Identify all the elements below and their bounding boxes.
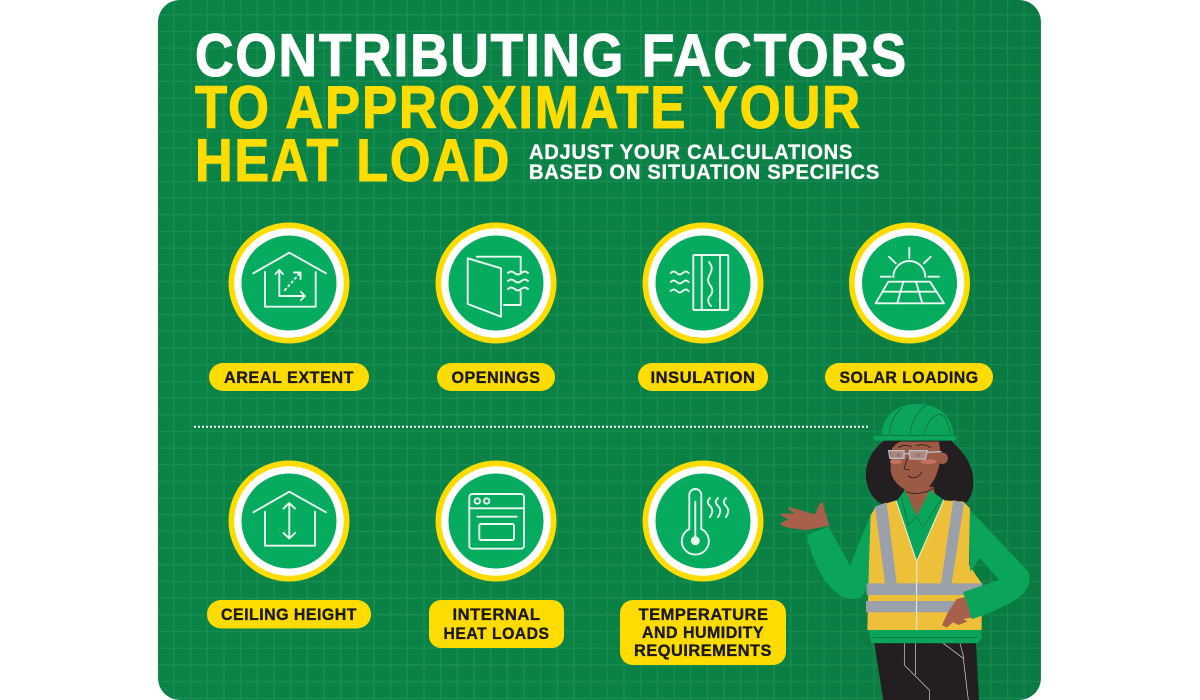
factor: temperature and humidity requirements (620, 460, 786, 665)
factor: temperature and humidity requirements: REQUIREMENTS (634, 641, 772, 660)
green background panel (158, 0, 1041, 700)
title: TO APPROXIMATE YOUR (195, 74, 862, 141)
factor: insulation (638, 222, 768, 391)
title: HEAT LOAD (195, 127, 511, 194)
subtitle: ADJUST YOUR CALCULATIONS (529, 141, 853, 164)
dotted divider (194, 426, 868, 428)
title (195, 22, 908, 194)
factor: internal heat loads (429, 460, 564, 648)
factor: areal extent: AREAL EXTENT (224, 368, 354, 387)
factor: openings (436, 222, 556, 391)
factor: solar loading: SOLAR LOADING (840, 368, 978, 387)
factor: ceiling height (207, 460, 371, 628)
icon: house with area arrows (253, 253, 326, 307)
icon: oven (469, 494, 524, 549)
factor: areal extent (209, 222, 369, 391)
icon: sun over solar panel (876, 248, 944, 303)
factor: solar loading (825, 222, 993, 391)
illustration: engineer in hard hat and safety vest (780, 404, 1029, 700)
icon: thermometer with steam (682, 489, 728, 555)
icon: open door with air waves (468, 257, 528, 317)
factor: internal heat loads: INTERNAL (452, 605, 540, 624)
factor: internal heat loads: HEAT LOADS (444, 624, 550, 643)
title: CONTRIBUTING FACTORS (195, 22, 908, 89)
factor: ceiling height: CEILING HEIGHT (221, 605, 357, 624)
factor: openings: OPENINGS (452, 368, 540, 387)
icon: house with vertical arrow (253, 492, 326, 546)
subtitle: BASED ON SITUATION SPECIFICS (529, 161, 880, 184)
icon: insulated wall with waves (671, 255, 728, 310)
factor: temperature and humidity requirements: TEMPERATURE (638, 605, 768, 624)
factor: temperature and humidity requirements: AND HUMIDITY (642, 623, 764, 642)
factor: insulation: INSULATION (650, 368, 756, 387)
infographic canvas (158, 0, 1041, 700)
subtitle (529, 141, 880, 184)
